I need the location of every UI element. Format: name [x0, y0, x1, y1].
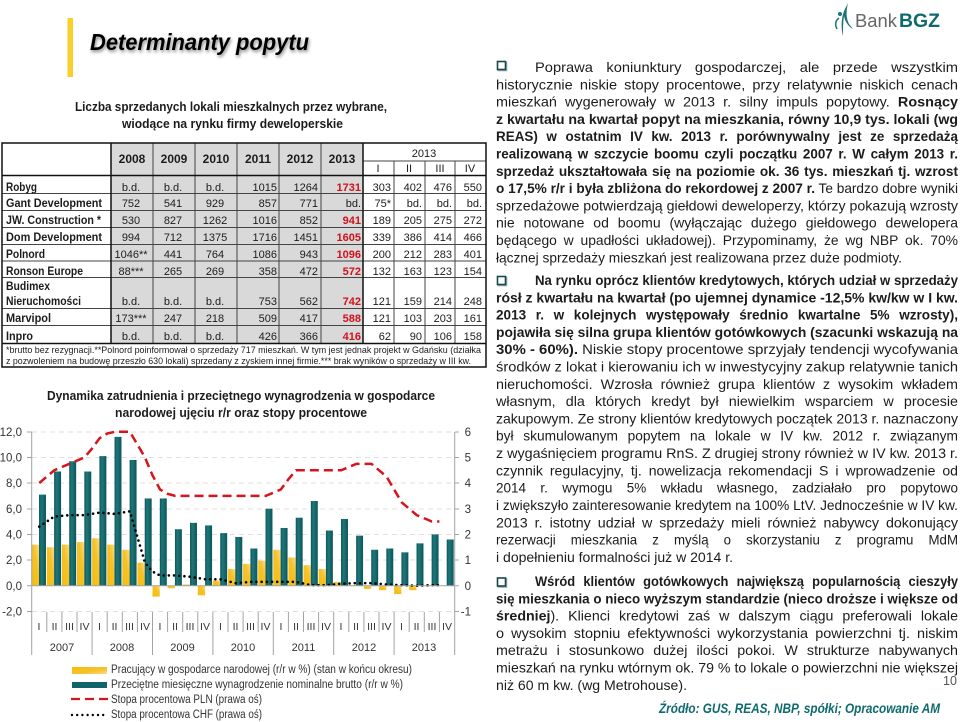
legend: wages: Przeciętne miesięczne wynagrodzenie nominalne brutto (r/r w %)	[111, 679, 403, 691]
2013 highlighted totals: 416	[343, 331, 361, 343]
2013 highlighted totals: 1096	[337, 249, 361, 261]
row labels	[6, 180, 102, 343]
annual figures: b.d.	[206, 296, 224, 308]
chart title	[47, 389, 435, 420]
annual figures: b.d.	[164, 296, 182, 308]
annual figures: b.d.	[122, 331, 140, 343]
accent bar	[68, 18, 73, 77]
text block: credit and cash clients: 2013 r. w kolejnych występowały średnio kwartalne 5% wzrosty),	[496, 307, 958, 323]
legend: PLN rate: Stopa procentowa PLN (prawa oś)	[111, 694, 262, 706]
row labels: Dom Development	[6, 230, 102, 244]
quarterly figures: 283	[434, 249, 452, 261]
table header: 2011	[245, 152, 271, 166]
quarter labels: I	[340, 621, 342, 633]
right axis labels: 4	[465, 478, 472, 490]
annual figures: b.d.	[206, 331, 224, 343]
annual figures: 530	[122, 215, 140, 227]
quarterly figures: 402	[404, 182, 422, 194]
quarterly figures: 132	[373, 266, 391, 278]
quarterly figures: 200	[373, 249, 391, 261]
quarterly figures: 62	[379, 331, 391, 343]
annual figures: 764	[206, 249, 224, 261]
text block: recovery of demand: sprzedaż ukształtowała się na poziomie ok. 36 tys. mieszkań tj. wzrost	[496, 163, 958, 179]
annual figures: 1262	[203, 215, 227, 227]
quarter labels: IV	[321, 621, 331, 633]
quarter labels: IV	[140, 621, 150, 633]
annual figures: 426	[259, 331, 277, 343]
logo: Bank BGZ: BGZ	[899, 11, 940, 32]
row labels: Inpro	[6, 329, 33, 343]
text block: credit and cash clients: był skumulowanym popytem na lokale w IV kw. 2012 r. związanym	[496, 428, 958, 444]
quarter labels: II	[293, 621, 299, 633]
quarter labels: III	[246, 621, 255, 633]
quarterly figures: 214	[434, 296, 452, 308]
text block: recovery of demand: Poprawa koniunktury gospodarczej, ale przede wszystkim	[535, 59, 958, 75]
text block: credit and cash clients: i zwiększyło zainteresowanie kredytem na 100% LtV. Jednocześnie w IV kw.	[496, 497, 958, 513]
table header: 2012	[287, 152, 314, 166]
annual figures: 472	[300, 266, 318, 278]
quarter labels: II	[414, 621, 419, 633]
annual figures: b.d.	[206, 182, 224, 194]
annual figures: 562	[300, 296, 318, 308]
table heading: Liczba sprzedanych lokali mieszkalnych przez wybrane,	[75, 100, 387, 114]
annual figures: 247	[164, 313, 182, 325]
quarterly figures: 401	[464, 249, 482, 261]
year labels: 2008	[110, 642, 134, 654]
text block: cash clients preferences: niż 60 m kw. (wg Metrohouse).	[496, 677, 687, 693]
annual figures: b.d.	[122, 296, 140, 308]
chart: employment, wages and interest rates	[0, 427, 472, 655]
left axis labels: 12,0	[0, 427, 22, 439]
year labels: 2013	[412, 642, 436, 654]
quarterly figures: bd.	[407, 198, 422, 210]
text block: cash clients preferences: metrażu i stosunkowo dużej ilości pokoi. W strukturze nabywanych	[496, 642, 958, 658]
annual figures: 1015	[253, 182, 277, 194]
text block: recovery of demand: będącego w upadłości układowej). Przypominamy, że wg NBP ok. 70%	[496, 232, 958, 248]
quarterly figures: 386	[404, 232, 422, 244]
quarterly figures: 275	[434, 215, 452, 227]
quarter labels: II	[233, 621, 238, 633]
quarter labels: I	[400, 621, 403, 633]
quarterly figures: 339	[373, 232, 391, 244]
page number: 10	[943, 674, 957, 688]
annual figures: 417	[300, 313, 318, 325]
text block: credit and cash clients	[495, 272, 958, 565]
quarterly figures: 550	[464, 182, 482, 194]
text block: cash clients preferences: mieszkań na rynku wtórnym ok. 79 % to lokale o powierzchni nie większej	[496, 660, 958, 676]
left axis labels: 10,0	[0, 452, 22, 464]
text block: recovery of demand: historycznie niskie stopy procentowe, przy relatywnie niskich cenach	[496, 76, 958, 92]
text block: credit and cash clients: i dopełnieniu formalności już w 2014 r.	[496, 549, 733, 565]
quarterly header: IV	[465, 163, 476, 175]
2013 highlighted totals: 1731	[337, 182, 361, 194]
text block: credit and cash clients: 30% - 60%). Niskie stopy procentowe sprzyjały tendencji wycofywania	[496, 341, 958, 357]
text block: recovery of demand: łącznej sprzedaży mieszkań jest realizowana przez duże podmioty.	[496, 249, 902, 265]
table heading	[75, 100, 387, 131]
quarter labels	[38, 621, 452, 633]
left axis labels: -2,0	[2, 606, 22, 618]
text block: credit and cash clients: nieruchomości. Wzrosła również grupa klientów z wysokim wkładem	[496, 376, 958, 392]
quarterly figures: 106	[434, 331, 452, 343]
legend: employment: Pracujący w gospodarce narodowej (r/r w %) (stan w końcu okresu)	[111, 664, 412, 676]
quarterly figures: 103	[404, 313, 422, 325]
annual figures: 712	[164, 232, 182, 244]
text block: recovery of demand: mieszkań wygenerowały w 2013 r. silny impuls popytowy. Rosnący	[496, 94, 958, 110]
2013 highlighted totals: 588	[343, 313, 361, 325]
row labels: JW. Construction *	[6, 213, 101, 227]
left axis labels: 0,0	[6, 581, 22, 593]
quarterly figures: 123	[434, 266, 452, 278]
quarter labels: IV	[261, 621, 270, 633]
table header	[119, 152, 356, 166]
quarterly figures: 476	[434, 182, 452, 194]
quarterly figures: 466	[464, 232, 482, 244]
text block: credit and cash clients: pojawiła się silna grupa klientów gotówkowych (szacunki wskazują na	[496, 324, 958, 340]
annual figures: 929	[206, 198, 224, 210]
quarterly figures: 203	[434, 313, 452, 325]
annual figures: 1264	[294, 182, 318, 194]
quarterly figures: 272	[464, 215, 482, 227]
annual figures: 1716	[253, 232, 277, 244]
right axis labels: 3	[465, 504, 471, 516]
quarter labels: IV	[80, 621, 89, 633]
right axis labels: 5	[465, 452, 471, 464]
annual figures: b.d.	[164, 331, 182, 343]
year labels: 2010	[231, 642, 255, 654]
annual figures: 771	[300, 198, 318, 210]
year labels: 2007	[50, 642, 74, 654]
quarterly figures: 212	[404, 249, 422, 261]
annual figures: 366	[300, 331, 318, 343]
quarterly figures: 159	[404, 296, 422, 308]
text block: recovery of demand: sprzedażowe potwierdzają giełdowi deweloperzy, którzy pokazują wzrosty	[496, 197, 958, 213]
table footnote: z pozwoleniem na budowę przeszło 630 lokali) sprzedany z zyskiem innej firmie.*** brak wyników o sprzedaży w III kw.	[6, 356, 471, 367]
quarterly figures: 154	[464, 266, 482, 278]
row labels: Gant Development	[6, 196, 102, 210]
right axis labels	[461, 427, 472, 618]
quarterly figures: 75*	[374, 198, 392, 210]
text block: credit and cash clients: własnym, dla których kredyt był niewielkim wsparciem w procesie	[495, 393, 958, 409]
row labels: Ronson Europe	[6, 264, 83, 278]
icon: bullet square	[498, 578, 506, 586]
bars: employment	[32, 538, 417, 597]
quarterly figures: bd.	[437, 198, 452, 210]
annual figures: 265	[164, 266, 182, 278]
table footnote: *brutto bez rezygnacji.**Polnord poinformował o sprzedaży 717 mieszkań. W tym jest jednak projekt w Gdańsku (działka	[6, 345, 482, 356]
quarter labels: III	[367, 621, 376, 633]
left axis labels: 2,0	[6, 555, 22, 567]
row labels: Budimex	[6, 279, 50, 293]
annual figures: 1086	[253, 249, 277, 261]
left axis labels: 6,0	[6, 504, 22, 516]
icon: bullet square	[498, 62, 506, 70]
text block: recovery of demand: nie notowane od boomu (wyłączając dużego giełdowego dewelopera	[496, 215, 958, 231]
right axis labels: 6	[465, 427, 471, 439]
quarter labels: III	[65, 621, 74, 633]
right axis labels: 0	[465, 581, 471, 593]
quarterly figures: 121	[373, 296, 391, 308]
table heading: wiodące na rynku firmy deweloperskie	[121, 117, 343, 131]
row labels: Nieruchomości	[6, 294, 81, 308]
quarterly figures: 121	[373, 313, 391, 325]
text block: credit and cash clients: zakupowym. Ze strony klientów kredytowych początek 2013 r. naznaczony	[496, 410, 958, 426]
quarter labels: I	[159, 621, 161, 633]
line: CHF rate	[39, 511, 439, 586]
annual figures: 827	[164, 215, 182, 227]
table footnote	[6, 345, 482, 367]
quarterly header	[376, 148, 476, 175]
annual figures: 852	[300, 215, 318, 227]
annual figures: 753	[259, 296, 277, 308]
table header: 2008	[119, 152, 146, 166]
quarterly figures: 248	[464, 296, 482, 308]
text block: recovery of demand	[496, 59, 958, 265]
quarter labels: I	[38, 621, 40, 633]
text block: credit and cash clients: środków z lokat i kierowaniu ich w inwestycyjny zakup relatywnie tanich	[496, 358, 958, 374]
annual figures: 1016	[253, 215, 277, 227]
quarterly figures: 158	[464, 331, 482, 343]
annual figures: 857	[259, 198, 277, 210]
annual figures: 1046**	[114, 249, 148, 261]
right axis labels: 1	[465, 555, 471, 567]
quarter labels: III	[307, 621, 315, 633]
text block: credit and cash clients: z wygaśnięciem programu RnS. Z drugiej strony również w IV kw. 2013 r.	[496, 445, 958, 461]
row labels: Marvipol	[6, 311, 51, 325]
2013 highlighted totals: 1605	[337, 232, 361, 244]
annual figures: b.d.	[164, 182, 182, 194]
table header: 2013	[329, 152, 356, 166]
quarterly figures: 161	[464, 313, 482, 325]
annual figures: 1451	[294, 232, 318, 244]
annual figures: 173***	[115, 313, 147, 325]
chart title: narodowej ujęciu r/r oraz stopy procentowe	[115, 406, 367, 420]
quarterly header: II	[406, 163, 412, 175]
quarterly figures	[373, 182, 482, 343]
text block: cash clients preferences: średniej). Klienci kredytowi zaś w dalszym ciągu preferowali lokale	[496, 608, 958, 624]
quarter labels: II	[353, 621, 359, 633]
logo: Bank BGZ: Bank	[855, 11, 898, 31]
annual figures: 88***	[118, 266, 144, 278]
quarter labels: II	[112, 621, 117, 633]
quarterly header: I	[376, 163, 380, 175]
left axis labels: 4,0	[6, 530, 22, 542]
table header: 2009	[161, 152, 188, 166]
year labels: 2012	[352, 642, 376, 654]
2013 highlighted totals: 742	[343, 296, 361, 308]
quarter labels: III	[125, 621, 134, 633]
text block: recovery of demand: z kwartału na kwartał popyt na mieszkania, równy 10,9 tys. lokali (wg	[496, 111, 958, 127]
annual figures: 943	[300, 249, 318, 261]
panel: sales table	[2, 143, 486, 367]
row labels: Polnord	[6, 247, 45, 261]
annual figures: 1375	[203, 232, 227, 244]
quarter labels: II	[52, 621, 57, 633]
quarterly figures: 189	[373, 215, 391, 227]
right axis labels: 2	[465, 530, 471, 542]
chart title: Dynamika zatrudnienia i przeciętnego wynagrodzenia w gospodarce	[47, 389, 435, 403]
chart legend	[71, 664, 412, 721]
annual figures: 752	[122, 198, 140, 210]
text block: credit and cash clients: rósł z kwartału na kwartał (po ujemnej dynamice -12,5% kw/kw w I kw.	[496, 289, 958, 305]
text block: recovery of demand: o 17,5% r/r i była zbliżona do rekordowej z 2007 r. Te bardzo dobre wyniki	[496, 180, 958, 196]
quarter labels: III	[428, 621, 436, 633]
quarter labels: II	[172, 621, 178, 633]
quarterly figures: bd.	[467, 198, 482, 210]
annual figures: 358	[259, 266, 277, 278]
annual figures: bd.	[346, 198, 361, 210]
annual figures	[114, 182, 361, 343]
chart axes	[27, 432, 459, 655]
year labels: 2009	[170, 642, 195, 654]
quarterly header: 2013	[412, 148, 436, 160]
line: PLN rate	[39, 432, 439, 522]
quarter labels: IV	[382, 621, 391, 633]
text block: cash clients preferences	[496, 573, 958, 693]
quarterly figures: 303	[373, 182, 391, 194]
text block: credit and cash clients: czynnik regulacyjny, tj. nowelizacja rekomendacji S i wprowadzenie od	[496, 462, 958, 478]
quarter labels: I	[219, 621, 222, 633]
icon: bullet square	[498, 276, 506, 284]
quarter labels: IV	[442, 621, 452, 633]
text block: credit and cash clients: 2013 r. istotny udział w sprzedaży mieli również nabywcy dokonujący	[496, 514, 958, 530]
quarterly figures: 90	[410, 331, 422, 343]
annual figures: b.d.	[122, 182, 140, 194]
row labels: Robyg	[6, 180, 37, 194]
bars: wages	[39, 437, 454, 586]
annual figures: 218	[206, 313, 224, 325]
title: Determinanty popytu	[90, 29, 309, 55]
quarter labels: III	[186, 621, 194, 633]
annual figures: 994	[122, 232, 140, 244]
quarterly figures: 205	[404, 215, 422, 227]
quarter labels: I	[98, 621, 101, 633]
table header: 2010	[203, 152, 230, 166]
quarter labels: IV	[200, 621, 210, 633]
left axis labels	[0, 427, 22, 618]
quarterly figures: 414	[434, 232, 452, 244]
annual figures: 441	[164, 249, 182, 261]
annual figures: 269	[206, 266, 224, 278]
quarterly header: III	[435, 163, 445, 175]
2013 highlighted totals: 572	[343, 266, 361, 278]
text block: cash clients preferences: o wysokim stopniu efektywności wykorzystania powierzchni tj. niskim	[496, 625, 958, 641]
legend: CHF rate: Stopa procentowa CHF (prawa oś)	[111, 709, 262, 721]
quarterly figures: 163	[404, 266, 422, 278]
2013 highlighted totals: 941	[343, 215, 361, 227]
2013 highlighted totals	[337, 182, 361, 343]
quarter labels: I	[280, 621, 282, 633]
year labels: 2011	[292, 642, 315, 654]
year labels	[50, 642, 436, 654]
right axis labels: -1	[461, 606, 471, 618]
annual figures: 541	[164, 198, 182, 210]
logo: Bank BGZ	[836, 3, 940, 36]
annual figures: 509	[259, 313, 277, 325]
left axis labels: 8,0	[6, 478, 22, 490]
